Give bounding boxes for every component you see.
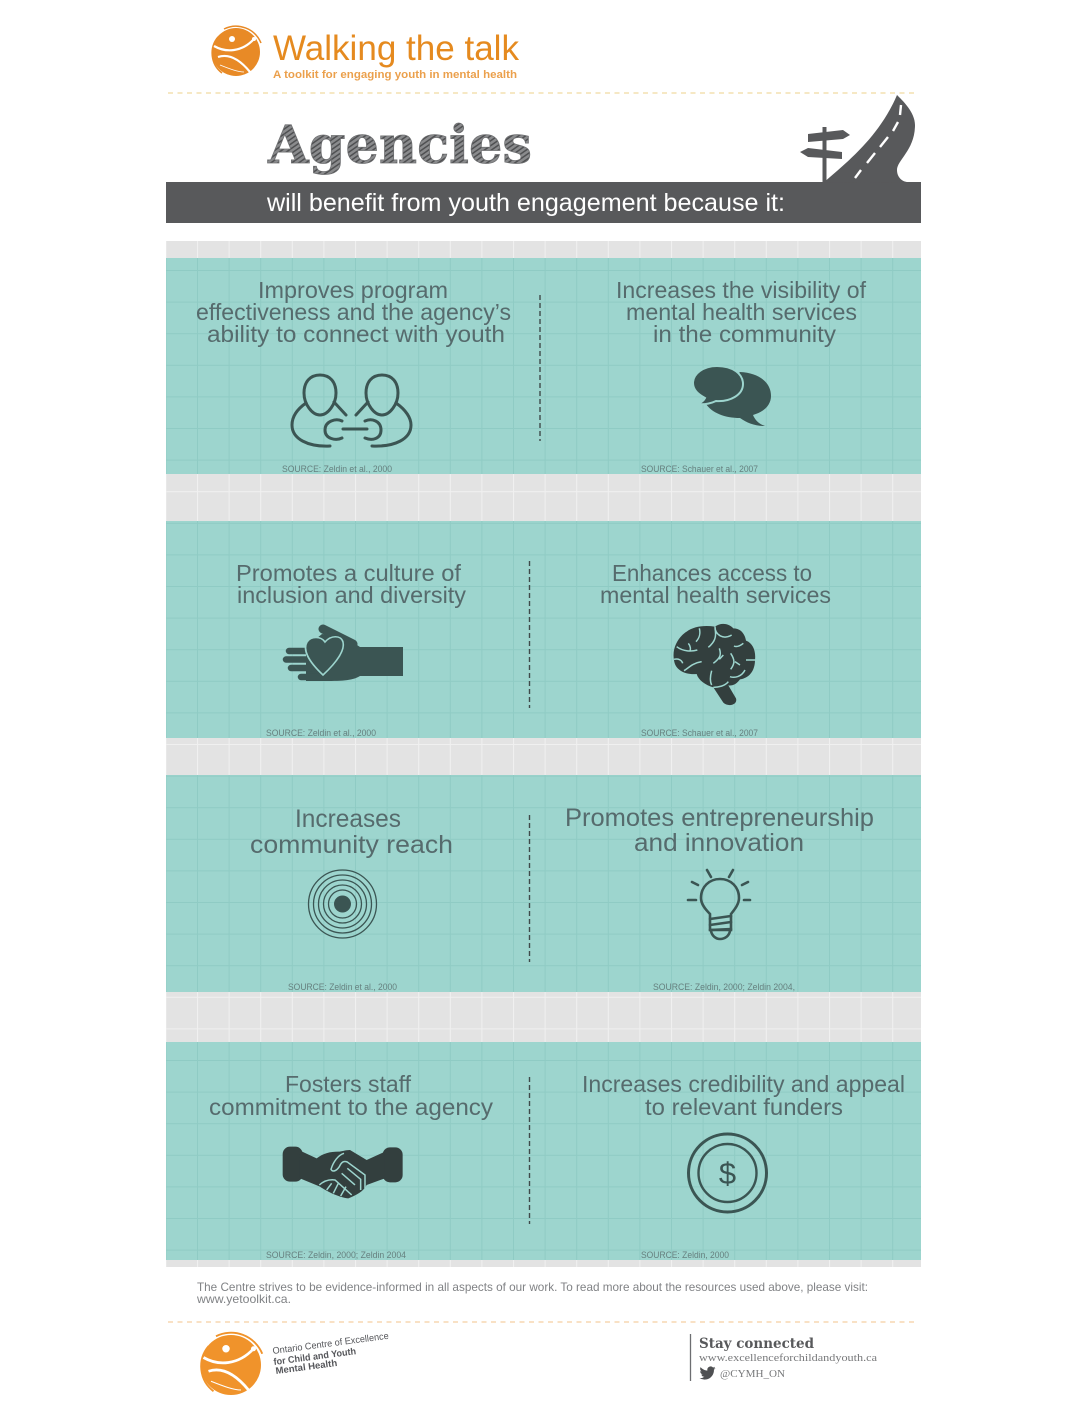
heading: culture of inclusion [236,560,466,608]
icon: speech bubbles [693,366,771,426]
heading: entrepreneurship [565,804,874,857]
heading: improves program: effectiveness and the agency’s [196,299,511,325]
source: SOURCE: Schauer et al., 2007 [641,728,758,738]
heading: visibility: in the community [653,321,837,347]
heading: culture of inclusion: Promotes a culture of [236,560,462,586]
heading: improves program: ability to connect with youth [207,321,505,347]
heading: credibility [582,1071,905,1120]
heading: visibility [616,277,867,347]
heading: improves program: Improves program [258,277,448,303]
banner [166,182,921,223]
heading: staff commitment: Fosters staff [285,1071,412,1097]
heading: enhances access: Enhances access to [612,560,812,586]
heading: staff commitment [209,1071,494,1120]
heading: credibility: to relevant funders [645,1094,843,1120]
grey background grid [166,241,921,1267]
panel: row 4 [166,1042,921,1260]
source: SOURCE: Schauer et al., 2007 [641,464,758,474]
contact block: stay connected [690,1334,877,1381]
icon: light bulb [688,870,750,939]
icon: twitter bird [700,1367,716,1380]
website: www.excellenceforchildandyouth.ca [699,1353,877,1364]
icon: orange figure logo [212,26,261,76]
source: SOURCE: Zeldin, 2000 [641,1250,729,1260]
source: SOURCE: Zeldin, 2000; Zeldin 2004 [266,1250,406,1260]
panel: row 2 [166,521,921,738]
contact heading: Stay connected [699,1336,815,1352]
heading: visibility: mental health services [626,299,857,325]
source: SOURCE: Zeldin et al., 2000 [288,982,397,992]
heading: staff commitment: commitment to the agency [209,1094,494,1120]
organisation name: Mental Health [275,1358,338,1377]
icon: concentric target [308,870,376,938]
organisation name: Ontario Centre of Excellence [272,1331,389,1357]
footer logo: Ontario Centre of Excellence [201,1331,389,1395]
heading: culture of inclusion: inclusion and diversity [237,582,466,608]
organisation name [272,1331,389,1377]
icon: dollar coin [688,1134,766,1212]
icon: hand with heart [286,629,403,681]
icon: brain [674,624,755,705]
heading: enhances access: mental health services [600,582,831,608]
source: SOURCE: Zeldin et al., 2000 [282,464,392,474]
icon: handshake [283,1147,403,1198]
icon: dollar coin: $ [719,1156,736,1191]
heading: entrepreneurship: and innovation [634,829,804,857]
header logo: Walking the talk [212,26,519,81]
footnote text [196,1280,868,1306]
footnote text: www.yetoolkit.ca. [196,1292,291,1306]
icon: orange figure logo [201,1333,262,1395]
subtitle: A toolkit for engaging youth in mental health [273,69,517,81]
heading: improves program [196,277,511,347]
heading: community reach [250,805,453,859]
heading: community reach: community reach [250,831,453,859]
panel: row 1 [166,258,921,474]
source: SOURCE: Zeldin, 2000; Zeldin 2004, [653,982,795,992]
heading: credibility: Increases credibility and appeal [582,1071,905,1097]
footnote text: The Centre strives to be evidence-informed in all aspects of our work. To read more about the resources used above, please visit: [197,1280,868,1294]
source: SOURCE: Zeldin et al., 2000 [266,728,376,738]
panel: row 3 [166,775,921,992]
heading: enhances access [600,560,831,608]
heading: community reach: Increases [295,805,401,833]
heading: entrepreneurship: Promotes entrepreneurship [565,804,874,832]
heading: Agencies: Agencies [267,115,532,176]
heading: visibility: Increases the visibility of [616,277,867,303]
icon: road and signpost [800,95,915,183]
banner text: will benefit from youth engagement because it: [266,189,785,217]
title: Walking the talk [273,29,519,68]
organisation name: for Child and Youth [273,1346,357,1368]
icon: two connected people [292,375,411,446]
twitter handle: @CYMH_ON [720,1369,785,1380]
